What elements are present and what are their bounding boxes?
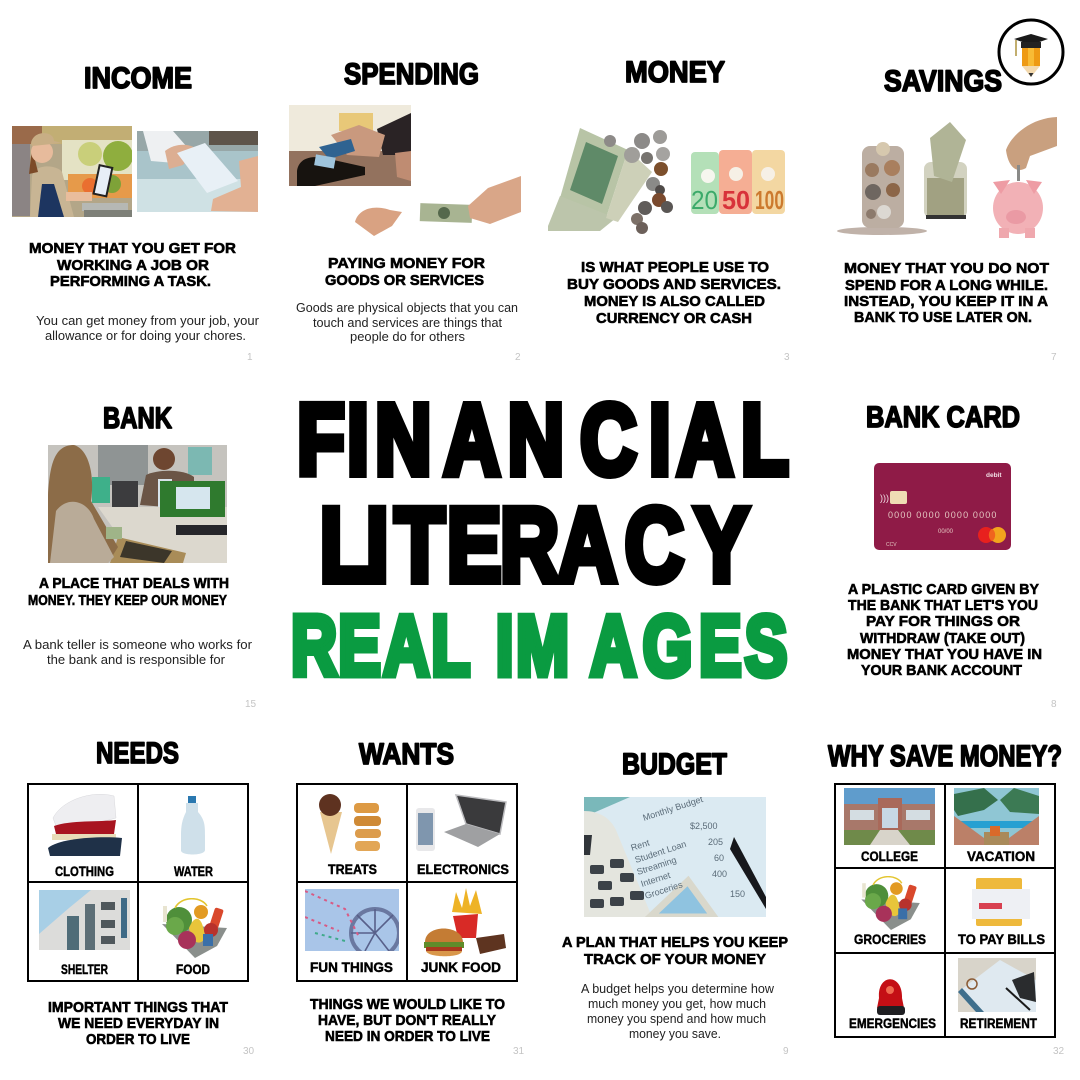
panel: bank card	[847, 401, 1057, 710]
grid: wants	[297, 784, 517, 981]
definition: budget	[562, 934, 788, 968]
panel: bank	[23, 402, 257, 710]
subtitle: real images: REAL IMAGES	[291, 598, 787, 693]
grid: needs	[28, 784, 248, 981]
illustration: red debit card: debit	[986, 472, 1002, 479]
definition: bank card: THE BANK THAT LET'S YOU	[848, 597, 1038, 614]
photo: monthly budget sheet and calculator: Monthly Budget	[642, 794, 705, 823]
definition: savings: MONEY THAT YOU DO NOT	[844, 260, 1049, 277]
main title	[291, 385, 789, 693]
cell: electronics	[416, 795, 509, 877]
definition: spending	[325, 255, 485, 289]
cell: water	[174, 796, 213, 879]
heading: bank: BANK	[103, 402, 172, 435]
cell: treats	[319, 794, 381, 877]
definition: bank: A PLACE THAT DEALS WITH	[39, 575, 229, 592]
cell: to pay bills: TO PAY BILLS	[958, 932, 1045, 947]
definition: savings	[844, 260, 1049, 326]
page number: 7	[1051, 352, 1057, 363]
definition: income: MONEY THAT YOU GET FOR	[29, 240, 236, 257]
photo: monthly budget sheet and calculator	[584, 794, 766, 917]
cell: to pay bills	[958, 878, 1045, 947]
definition: savings: BANK TO USE LATER ON.	[854, 309, 1032, 326]
note: spending: people do for others	[350, 330, 465, 344]
page number: 2	[515, 352, 521, 363]
panel: income	[12, 62, 259, 363]
panel: money	[548, 56, 790, 363]
cell: clothing: CLOTHING	[55, 864, 114, 879]
cell: fun things: FUN THINGS	[310, 960, 393, 975]
photo: monthly budget sheet and calculator: Internet	[640, 870, 672, 889]
photo: hands exchanging dollar bill	[355, 176, 521, 236]
note: bank teller: the bank and is responsible for	[47, 653, 225, 667]
panel: why save money	[828, 740, 1065, 1057]
illustration: red debit card	[874, 463, 1011, 550]
definition: bank card	[847, 581, 1042, 679]
definition: income: WORKING A JOB OR	[57, 257, 209, 274]
definition: money: CURRENCY OR CASH	[596, 310, 752, 327]
photo: rolled Canadian banknotes: 20	[691, 185, 718, 215]
cell: retirement: RETIREMENT	[960, 1016, 1038, 1031]
cell: groceries: GROCERIES	[854, 932, 926, 947]
photo: jar of bills	[924, 122, 967, 219]
definition: spending: GOODS OR SERVICES	[325, 272, 484, 289]
note: income	[36, 314, 259, 343]
cell: emergencies	[849, 979, 936, 1031]
cell: electronics: ELECTRONICS	[417, 862, 509, 877]
definition: savings: INSTEAD, YOU KEEP IT IN A	[844, 293, 1048, 310]
definition: money	[567, 259, 781, 327]
heading: bank card: BANK CARD	[866, 401, 1020, 434]
page number: 1	[247, 352, 253, 363]
note: spending: Goods are physical objects that you can	[296, 301, 518, 315]
photo: paycheck handed over	[137, 131, 258, 212]
definition: spending: PAYING MONEY FOR	[328, 255, 485, 272]
definition: money: IS WHAT PEOPLE USE TO	[581, 259, 769, 276]
note: bank teller: A bank teller is someone who works for	[23, 638, 252, 652]
page number: 9	[783, 1046, 789, 1057]
photo: card payment terminal	[289, 105, 411, 186]
definition: budget: A PLAN THAT HELPS YOU KEEP	[562, 934, 788, 951]
photo: monthly budget sheet and calculator: Streaming	[636, 855, 678, 877]
panel: wants	[297, 738, 525, 1057]
panel: budget	[562, 748, 789, 1057]
photo: monthly budget sheet and calculator: Rent	[630, 837, 651, 853]
heading: money: MONEY	[625, 56, 725, 89]
definition: bank	[28, 575, 229, 609]
page number: 3	[784, 352, 790, 363]
photo: coin jar	[837, 142, 927, 235]
definition: bank card: WITHDRAW (TAKE OUT)	[860, 630, 1025, 647]
heading: savings: SAVINGS	[884, 65, 1002, 98]
photo: monthly budget sheet and calculator: $2,500	[690, 821, 718, 831]
panel: needs	[28, 737, 255, 1057]
photo: monthly budget sheet and calculator: Groceries	[644, 879, 684, 901]
cell: junk food: JUNK FOOD	[421, 960, 501, 975]
note: budget: money you spend and how much	[587, 1012, 766, 1026]
heading: spending: SPENDING	[344, 58, 479, 91]
illustration: red debit card: 0000 0000 0000 0000	[888, 510, 997, 520]
cell: fun things	[305, 889, 399, 975]
cell: clothing	[48, 794, 122, 879]
definition: savings: SPEND FOR A LONG WHILE.	[845, 277, 1048, 294]
cell: junk food	[421, 888, 506, 975]
heading: needs: NEEDS	[96, 737, 179, 770]
definition: wants	[310, 996, 505, 1045]
illustration: red debit card: CCV	[886, 542, 897, 548]
cell: food: FOOD	[176, 962, 210, 977]
cell: groceries	[854, 877, 926, 947]
illustration: red debit card: 00/00	[938, 529, 954, 535]
cell: emergencies: EMERGENCIES	[849, 1016, 936, 1031]
cell: college: COLLEGE	[861, 849, 918, 864]
page number: 15	[245, 699, 257, 710]
page number: 30	[243, 1046, 255, 1057]
page number: 31	[513, 1046, 525, 1057]
definition: bank card: YOUR BANK ACCOUNT	[861, 662, 1022, 679]
photo: monthly budget sheet and calculator: 150	[730, 889, 745, 899]
cell: water: WATER	[174, 864, 213, 879]
definition: budget: TRACK OF YOUR MONEY	[584, 951, 766, 968]
definition: money: MONEY IS ALSO CALLED	[584, 293, 765, 310]
definition: wants: HAVE, BUT DON'T REALLY	[318, 1012, 496, 1029]
title: literacy: LITERACY	[320, 486, 749, 603]
cell: shelter: SHELTER	[61, 962, 108, 977]
cell: food	[162, 899, 227, 977]
definition: income: PERFORMING A TASK.	[50, 273, 211, 290]
page number: 32	[1053, 1046, 1065, 1057]
cell: college	[844, 788, 935, 864]
photo: rolled Canadian banknotes: 50	[722, 185, 750, 215]
definition: needs: ORDER TO LIVE	[86, 1031, 190, 1048]
cell: vacation	[954, 788, 1039, 864]
note: budget: much money you get, how much	[588, 997, 766, 1011]
definition: money: BUY GOODS AND SERVICES.	[567, 276, 781, 293]
logo: graduation cap pencil	[999, 20, 1063, 84]
heading: income: INCOME	[84, 62, 192, 95]
heading: budget: BUDGET	[622, 748, 727, 781]
photo: monthly budget sheet and calculator: Student Loan	[634, 839, 688, 865]
definition: bank card: PAY FOR THINGS OR	[866, 613, 1020, 630]
cell: retirement	[958, 958, 1038, 1031]
cell: shelter	[39, 890, 130, 977]
definition: needs: IMPORTANT THINGS THAT	[48, 999, 228, 1016]
photo: bank teller counter	[48, 445, 227, 563]
note: budget	[581, 982, 775, 1041]
definition: wants: THINGS WE WOULD LIKE TO	[310, 996, 505, 1013]
note: spending	[296, 301, 518, 344]
definition: needs: WE NEED EVERYDAY IN	[58, 1015, 219, 1032]
photo: grocery cashier	[12, 126, 132, 217]
definition: bank card: MONEY THAT YOU HAVE IN	[847, 646, 1042, 663]
panel: spending	[289, 58, 521, 363]
note: budget: money you save.	[629, 1027, 721, 1041]
panel: savings	[837, 65, 1057, 363]
heading: wants: WANTS	[359, 738, 454, 771]
note: bank teller	[23, 638, 252, 667]
note: income: allowance or for doing your chores.	[45, 329, 246, 343]
photo: monthly budget sheet and calculator: 60	[714, 853, 724, 863]
photo: hand and piggy bank	[993, 117, 1057, 238]
note: budget: A budget helps you determine how	[581, 982, 775, 996]
page number: 8	[1051, 699, 1057, 710]
definition: needs	[48, 999, 228, 1048]
title: financial: FINANCIAL	[297, 385, 789, 496]
grid: why save money	[835, 784, 1055, 1037]
definition: income	[29, 240, 236, 290]
photo: rolled Canadian banknotes	[691, 150, 785, 215]
illustration: red debit card: )))	[880, 493, 889, 503]
note: spending: touch and services are things that	[313, 316, 503, 330]
photo: rolled Canadian banknotes: 100	[755, 185, 784, 215]
photo: dollar bills and coins	[548, 128, 673, 234]
photo: monthly budget sheet and calculator: 205	[708, 837, 723, 847]
definition: wants: NEED IN ORDER TO LIVE	[325, 1028, 490, 1045]
definition: bank card: A PLASTIC CARD GIVEN BY	[848, 581, 1039, 598]
definition: bank: MONEY. THEY KEEP OUR MONEY	[28, 592, 227, 609]
photo: monthly budget sheet and calculator: 400	[712, 869, 727, 879]
cell: vacation: VACATION	[967, 849, 1035, 864]
cell: treats: TREATS	[328, 862, 377, 877]
note: income: You can get money from your job, your	[36, 314, 259, 328]
